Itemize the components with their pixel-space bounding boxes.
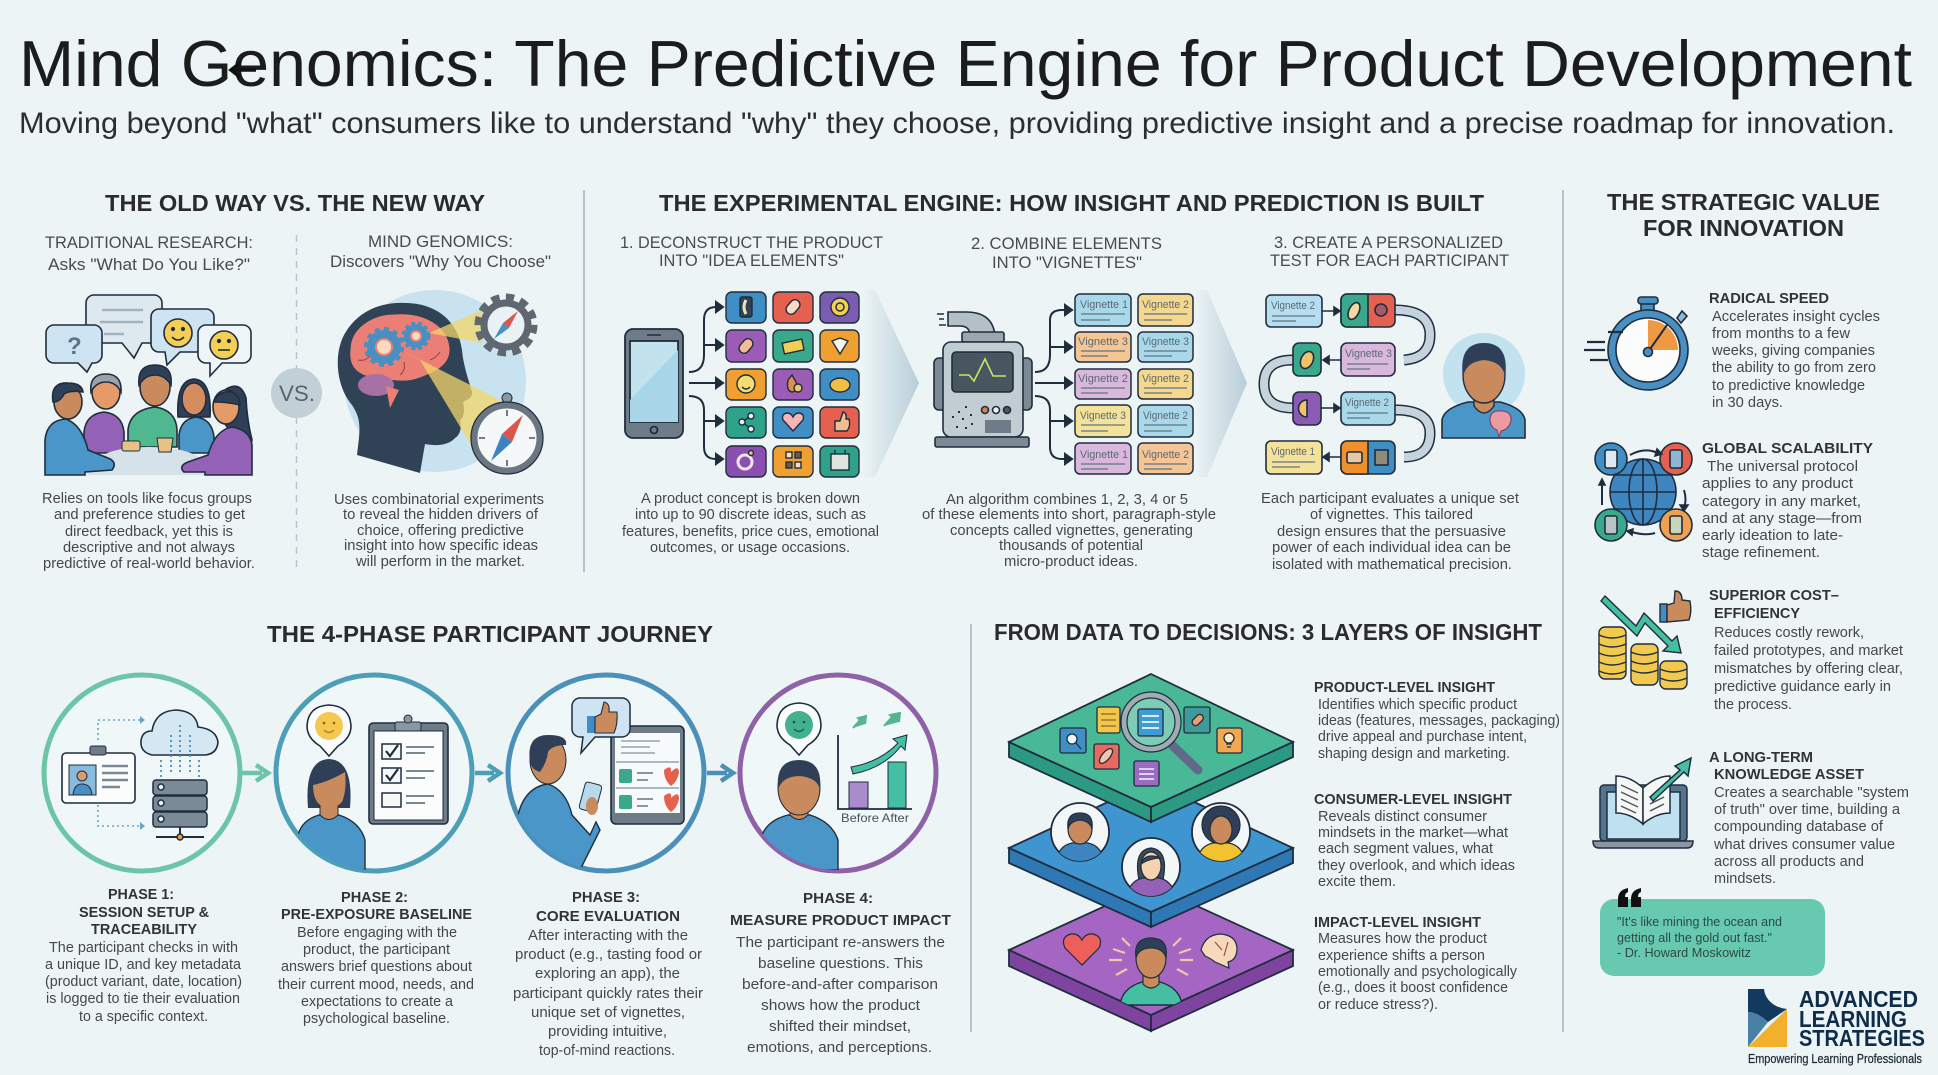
phase 1 text: a unique ID, and key metadata bbox=[45, 956, 242, 973]
phase 3 text: product (e.g., tasting food or bbox=[515, 946, 702, 963]
phase 1 text: TRACEABILITY bbox=[91, 921, 197, 938]
product-level text: PRODUCT-LEVEL INSIGHT bbox=[1314, 679, 1495, 696]
mind genomics heading: Discovers "Why You Choose" bbox=[330, 252, 551, 271]
phase 3 text: After interacting with the bbox=[528, 927, 688, 944]
phase 4 text: The participant re-answers the bbox=[736, 934, 945, 951]
impact-level text: experience shifts a person bbox=[1318, 947, 1485, 964]
cost efficiency text: the process. bbox=[1714, 696, 1792, 713]
global scalability text bbox=[1702, 440, 1873, 561]
icon: laptop with open book bbox=[1593, 758, 1693, 848]
long-term asset text bbox=[1709, 749, 1909, 887]
arrow: phase 2 to 3 bbox=[475, 765, 500, 781]
phase 4 text: before-and-after comparison bbox=[742, 976, 938, 993]
product-level text: shaping design and marketing. bbox=[1318, 745, 1510, 762]
cost efficiency text: mismatches by offering clear, bbox=[1714, 660, 1903, 677]
radical speed text: to predictive knowledge bbox=[1712, 377, 1865, 394]
heading: THE OLD WAY VS. THE NEW WAY bbox=[105, 190, 485, 216]
consumer-level text: CONSUMER-LEVEL INSIGHT bbox=[1314, 791, 1512, 808]
panel: three layers of insight bbox=[994, 619, 1560, 1031]
step 1 description: outcomes, or usage occasions. bbox=[650, 539, 850, 556]
title: Mind Genomics: The Predictive Engine for Product Development bbox=[19, 27, 1912, 100]
logo: Advanced Learning Strategies: ADVANCED bbox=[1799, 986, 1918, 1012]
cost efficiency text: SUPERIOR COST– bbox=[1709, 587, 1839, 604]
product-level text: drive appeal and purchase intent, bbox=[1318, 728, 1527, 745]
idea element tiles bbox=[726, 292, 859, 477]
phase 2 text: Before engaging with the bbox=[297, 924, 457, 941]
personalized test flow bbox=[1264, 294, 1430, 474]
phase 2 text: their current mood, needs, and bbox=[278, 976, 474, 993]
radical speed text: in 30 days. bbox=[1712, 394, 1783, 411]
consumer-level text: excite them. bbox=[1318, 873, 1396, 890]
icon: head with gears and compass bbox=[338, 290, 543, 474]
radical speed text: Accelerates insight cycles bbox=[1712, 308, 1880, 325]
callout: quote: - Dr. Howard Moskowitz bbox=[1617, 945, 1751, 960]
long-term asset text: Creates a searchable "system bbox=[1714, 784, 1909, 801]
mind genomics description bbox=[334, 491, 544, 570]
phase 4 text: baseline questions. This bbox=[758, 955, 923, 972]
step 1 description bbox=[622, 490, 879, 556]
phase 3 text: providing intuitive, bbox=[548, 1023, 667, 1040]
vignette cards: Vignette 2 bbox=[1142, 373, 1189, 385]
arrow: chevron step 1 to 2 bbox=[862, 290, 919, 477]
step 2 description: concepts called vignettes, generating bbox=[950, 522, 1193, 539]
phase 1 text: The participant checks in with bbox=[49, 939, 238, 956]
vignette cards: Vignette 3 bbox=[1080, 410, 1126, 422]
phase 3 text: unique set of vignettes, bbox=[531, 1004, 685, 1021]
global scalability text: early ideation to late- bbox=[1702, 527, 1843, 544]
vs badge bbox=[271, 368, 322, 418]
callout: quote bbox=[1600, 888, 1825, 976]
consumer-level text: Reveals distinct consumer bbox=[1318, 808, 1487, 825]
step 2 description: An algorithm combines 1, 2, 3, 4 or 5 bbox=[946, 491, 1188, 508]
heading bbox=[1607, 189, 1880, 241]
icon: focus group: ? bbox=[67, 333, 82, 360]
global scalability text: category in any market, bbox=[1702, 493, 1861, 510]
panel: participant journey bbox=[44, 621, 951, 1059]
step 2 description: of these elements into short, paragraph-style bbox=[922, 506, 1216, 523]
vignette cards: Vignette 2 bbox=[1142, 299, 1189, 311]
vs badge: VS. bbox=[279, 381, 315, 406]
step 3 description: power of each individual idea can be bbox=[1272, 539, 1511, 556]
radical speed text: from months to a few bbox=[1712, 325, 1850, 342]
step 2 heading: INTO "VIGNETTES" bbox=[992, 253, 1142, 272]
impact-level text: Measures how the product bbox=[1318, 930, 1488, 947]
step 1 heading: INTO "IDEA ELEMENTS" bbox=[659, 251, 844, 270]
long-term asset text: what drives consumer value bbox=[1713, 836, 1895, 853]
cost efficiency text: predictive guidance early in bbox=[1714, 678, 1891, 695]
icon: global network bbox=[1595, 443, 1692, 541]
personalized test flow: Vignette 2 bbox=[1345, 397, 1389, 409]
phase 2 text: answers brief questions about bbox=[281, 958, 473, 975]
step 1 description: into up to 90 discrete ideas, such as bbox=[635, 506, 866, 523]
phase 2 illustration bbox=[276, 675, 472, 871]
personalized test flow: Vignette 1 bbox=[1271, 446, 1315, 458]
traditional research description bbox=[42, 490, 255, 572]
step 2 description: micro-product ideas. bbox=[1004, 553, 1138, 570]
mind genomics description: insight into how specific ideas bbox=[344, 537, 538, 554]
vignette cards: Vignette 1 bbox=[1080, 299, 1128, 311]
impact-level text bbox=[1314, 914, 1517, 1013]
layer: product (green) bbox=[1009, 674, 1293, 822]
phase 4 illustration bbox=[740, 675, 936, 871]
phase 1 text: PHASE 1: bbox=[108, 886, 174, 903]
radical speed text: RADICAL SPEED bbox=[1709, 290, 1829, 307]
vignette cards bbox=[1075, 294, 1193, 474]
phase 3 illustration bbox=[508, 675, 704, 871]
global scalability text: applies to any product bbox=[1702, 475, 1854, 492]
heading: THE EXPERIMENTAL ENGINE: HOW INSIGHT AND PREDICTION IS BUILT bbox=[659, 190, 1485, 216]
step 1 description: features, benefits, price cues, emotional bbox=[622, 523, 879, 540]
radical speed text bbox=[1709, 290, 1880, 411]
traditional research description: direct feedback, yet this is bbox=[65, 523, 233, 540]
personalized test flow: Vignette 2 bbox=[1271, 300, 1315, 312]
callout: quote: "It's like mining the ocean and bbox=[1617, 914, 1782, 929]
vignette cards: Vignette 2 bbox=[1142, 449, 1189, 461]
phase 1 text: SESSION SETUP & bbox=[79, 904, 209, 921]
arrow: phase 3 to 4 bbox=[707, 765, 733, 781]
phase 3 text: CORE EVALUATION bbox=[536, 908, 680, 925]
consumer-level text: they overlook, and which ideas bbox=[1318, 857, 1515, 874]
mind genomics description: will perform in the market. bbox=[355, 553, 525, 570]
icon: combining machine bbox=[934, 312, 1032, 447]
icon: coins and falling arrow bbox=[1599, 591, 1691, 689]
mind genomics description: to reveal the hidden drivers of bbox=[343, 506, 539, 523]
callout: quote: getting all the gold out fast." bbox=[1617, 930, 1772, 945]
subtitle: Moving beyond "what" consumers like to understand "why" they choose, providing predictive insight and a precise roadmap for innovation. bbox=[19, 107, 1895, 140]
vignette cards: Vignette 3 bbox=[1142, 336, 1189, 348]
phase 2 text: psychological baseline. bbox=[303, 1010, 450, 1027]
step 3 heading: 3. CREATE A PERSONALIZED bbox=[1274, 233, 1503, 252]
mind genomics heading bbox=[330, 232, 551, 271]
phase 2 text: PRE-EXPOSURE BASELINE bbox=[281, 906, 472, 923]
phase 4 text bbox=[730, 890, 951, 1056]
cost efficiency text: Reduces costly rework, bbox=[1714, 624, 1864, 641]
product-level text bbox=[1314, 679, 1560, 762]
mind genomics heading: MIND GENOMICS: bbox=[368, 232, 513, 251]
step 3 description: of vignettes. This tailored bbox=[1310, 506, 1473, 523]
traditional research heading: Asks "What Do You Like?" bbox=[48, 255, 250, 274]
arrow: phase 1 to 2 bbox=[242, 765, 268, 781]
step 3 description: Each participant evaluates a unique set bbox=[1261, 490, 1520, 507]
cost efficiency text: EFFICIENCY bbox=[1714, 605, 1800, 622]
arrows: machine to vignettes bbox=[1035, 305, 1072, 464]
global scalability text: and at any stage—from bbox=[1702, 510, 1862, 527]
vignette cards: Vignette 2 bbox=[1078, 373, 1128, 385]
arrows: phone to idea elements bbox=[689, 302, 723, 464]
phase 4 text: shows how the product bbox=[761, 997, 921, 1014]
mind genomics description: choice, offering predictive bbox=[357, 522, 524, 539]
step 3 description bbox=[1261, 490, 1520, 573]
layer: impact (purple) bbox=[1007, 906, 1295, 1032]
cost efficiency text bbox=[1709, 587, 1904, 713]
vignette cards: Vignette 2 bbox=[1143, 410, 1188, 422]
phase 3 text: PHASE 3: bbox=[572, 889, 640, 906]
impact-level text: emotionally and psychologically bbox=[1318, 963, 1517, 980]
long-term asset text: across all products and bbox=[1714, 853, 1864, 870]
logo: Advanced Learning Strategies bbox=[1748, 986, 1925, 1066]
consumer-level text: each segment values, what bbox=[1318, 840, 1494, 857]
phase 1 text: to a specific context. bbox=[79, 1008, 208, 1025]
phase 3 text: participant quickly rates their bbox=[513, 985, 703, 1002]
logo: Advanced Learning Strategies: LEARNING bbox=[1799, 1006, 1907, 1032]
consumer-level text bbox=[1314, 791, 1515, 890]
step 2 description bbox=[922, 491, 1216, 570]
product-level text: Identifies which specific product bbox=[1318, 696, 1518, 713]
step 3 heading: TEST FOR EACH PARTICIPANT bbox=[1270, 251, 1509, 270]
vignette cards: Vignette 3 bbox=[1078, 336, 1128, 348]
phase 3 text: exploring an app), the bbox=[535, 965, 680, 982]
phase 4 text: PHASE 4: bbox=[803, 890, 873, 907]
phase 2 text: PHASE 2: bbox=[341, 889, 408, 906]
global scalability text: stage refinement. bbox=[1702, 544, 1820, 561]
phase 3 text bbox=[513, 889, 703, 1059]
traditional research heading: TRADITIONAL RESEARCH: bbox=[45, 233, 253, 252]
heading: FOR INNOVATION bbox=[1643, 215, 1844, 241]
consumer-level text: mindsets in the market—what bbox=[1318, 824, 1509, 841]
impact-level text: IMPACT-LEVEL INSIGHT bbox=[1314, 914, 1481, 931]
step 3 heading bbox=[1270, 233, 1509, 270]
traditional research description: and preference studies to get bbox=[54, 506, 246, 523]
panel: experimental engine bbox=[620, 190, 1525, 573]
phase 4 text: shifted their mindset, bbox=[769, 1018, 911, 1035]
traditional research heading bbox=[45, 233, 253, 274]
phase 2 text: expectations to create a bbox=[301, 993, 454, 1010]
long-term asset text: A LONG-TERM bbox=[1709, 749, 1813, 766]
impact-level text: (e.g., does it boost confidence bbox=[1318, 979, 1508, 996]
phase 1 text: (product variant, date, location) bbox=[45, 973, 242, 990]
radical speed text: the ability to go from zero bbox=[1712, 359, 1876, 376]
step 3 description: design ensures that the persuasive bbox=[1277, 523, 1506, 540]
arrow: chevron step 2 to 3 bbox=[1194, 290, 1247, 477]
icon: phone bbox=[625, 329, 683, 438]
icon: focus group bbox=[45, 295, 252, 475]
traditional research description: predictive of real-world behavior. bbox=[43, 555, 255, 572]
global scalability text: GLOBAL SCALABILITY bbox=[1702, 440, 1873, 457]
step 1 description: A product concept is broken down bbox=[641, 490, 860, 507]
impact-level text: or reduce stress?). bbox=[1318, 996, 1438, 1013]
long-term asset text: of truth" over time, building a bbox=[1714, 801, 1901, 818]
panel: old way vs new way bbox=[42, 190, 551, 572]
panel: strategic value bbox=[1584, 189, 1909, 976]
cost efficiency text: failed prototypes, and market bbox=[1714, 642, 1904, 659]
heading: FROM DATA TO DECISIONS: 3 LAYERS OF INSIGHT bbox=[994, 619, 1543, 645]
phase 4 text: emotions, and perceptions. bbox=[747, 1039, 932, 1056]
phase 2 text: product, the participant bbox=[303, 941, 451, 958]
heading: THE 4-PHASE PARTICIPANT JOURNEY bbox=[267, 621, 713, 647]
step 2 heading: 2. COMBINE ELEMENTS bbox=[971, 234, 1162, 253]
phase 1 illustration bbox=[44, 675, 240, 871]
global scalability text: The universal protocol bbox=[1707, 458, 1858, 475]
phase 4 text: MEASURE PRODUCT IMPACT bbox=[730, 912, 951, 929]
phase 3 text: top-of-mind reactions. bbox=[539, 1042, 675, 1059]
icon: stopwatch bbox=[1584, 297, 1688, 390]
layer: consumer (blue) bbox=[1007, 802, 1295, 928]
phase 2 text bbox=[278, 889, 474, 1027]
mind genomics description: Uses combinatorial experiments bbox=[334, 491, 544, 508]
vignette cards: Vignette 1 bbox=[1080, 449, 1128, 461]
radical speed text: weeks, giving companies bbox=[1711, 342, 1875, 359]
phase 1 text bbox=[45, 886, 242, 1025]
step 2 heading bbox=[971, 234, 1162, 272]
long-term asset text: compounding database of bbox=[1714, 818, 1884, 835]
long-term asset text: KNOWLEDGE ASSET bbox=[1714, 766, 1864, 783]
icon: participant with brain pin bbox=[1442, 333, 1525, 438]
long-term asset text: mindsets. bbox=[1714, 870, 1776, 887]
heading: THE STRATEGIC VALUE bbox=[1607, 189, 1880, 215]
step 2 description: thousands of potential bbox=[999, 537, 1143, 554]
step 1 heading bbox=[620, 233, 883, 270]
step 1 heading: 1. DECONSTRUCT THE PRODUCT bbox=[620, 233, 883, 252]
phase 4 illustration: Before After bbox=[841, 811, 909, 825]
traditional research description: Relies on tools like focus groups bbox=[42, 490, 252, 507]
phase 1 text: is logged to tie their evaluation bbox=[46, 990, 240, 1007]
personalized test flow: Vignette 3 bbox=[1345, 348, 1392, 360]
product-level text: ideas (features, messages, packaging) bbox=[1318, 712, 1560, 729]
traditional research description: descriptive and not always bbox=[63, 539, 235, 556]
step 3 description: isolated with mathematical precision. bbox=[1272, 556, 1512, 573]
